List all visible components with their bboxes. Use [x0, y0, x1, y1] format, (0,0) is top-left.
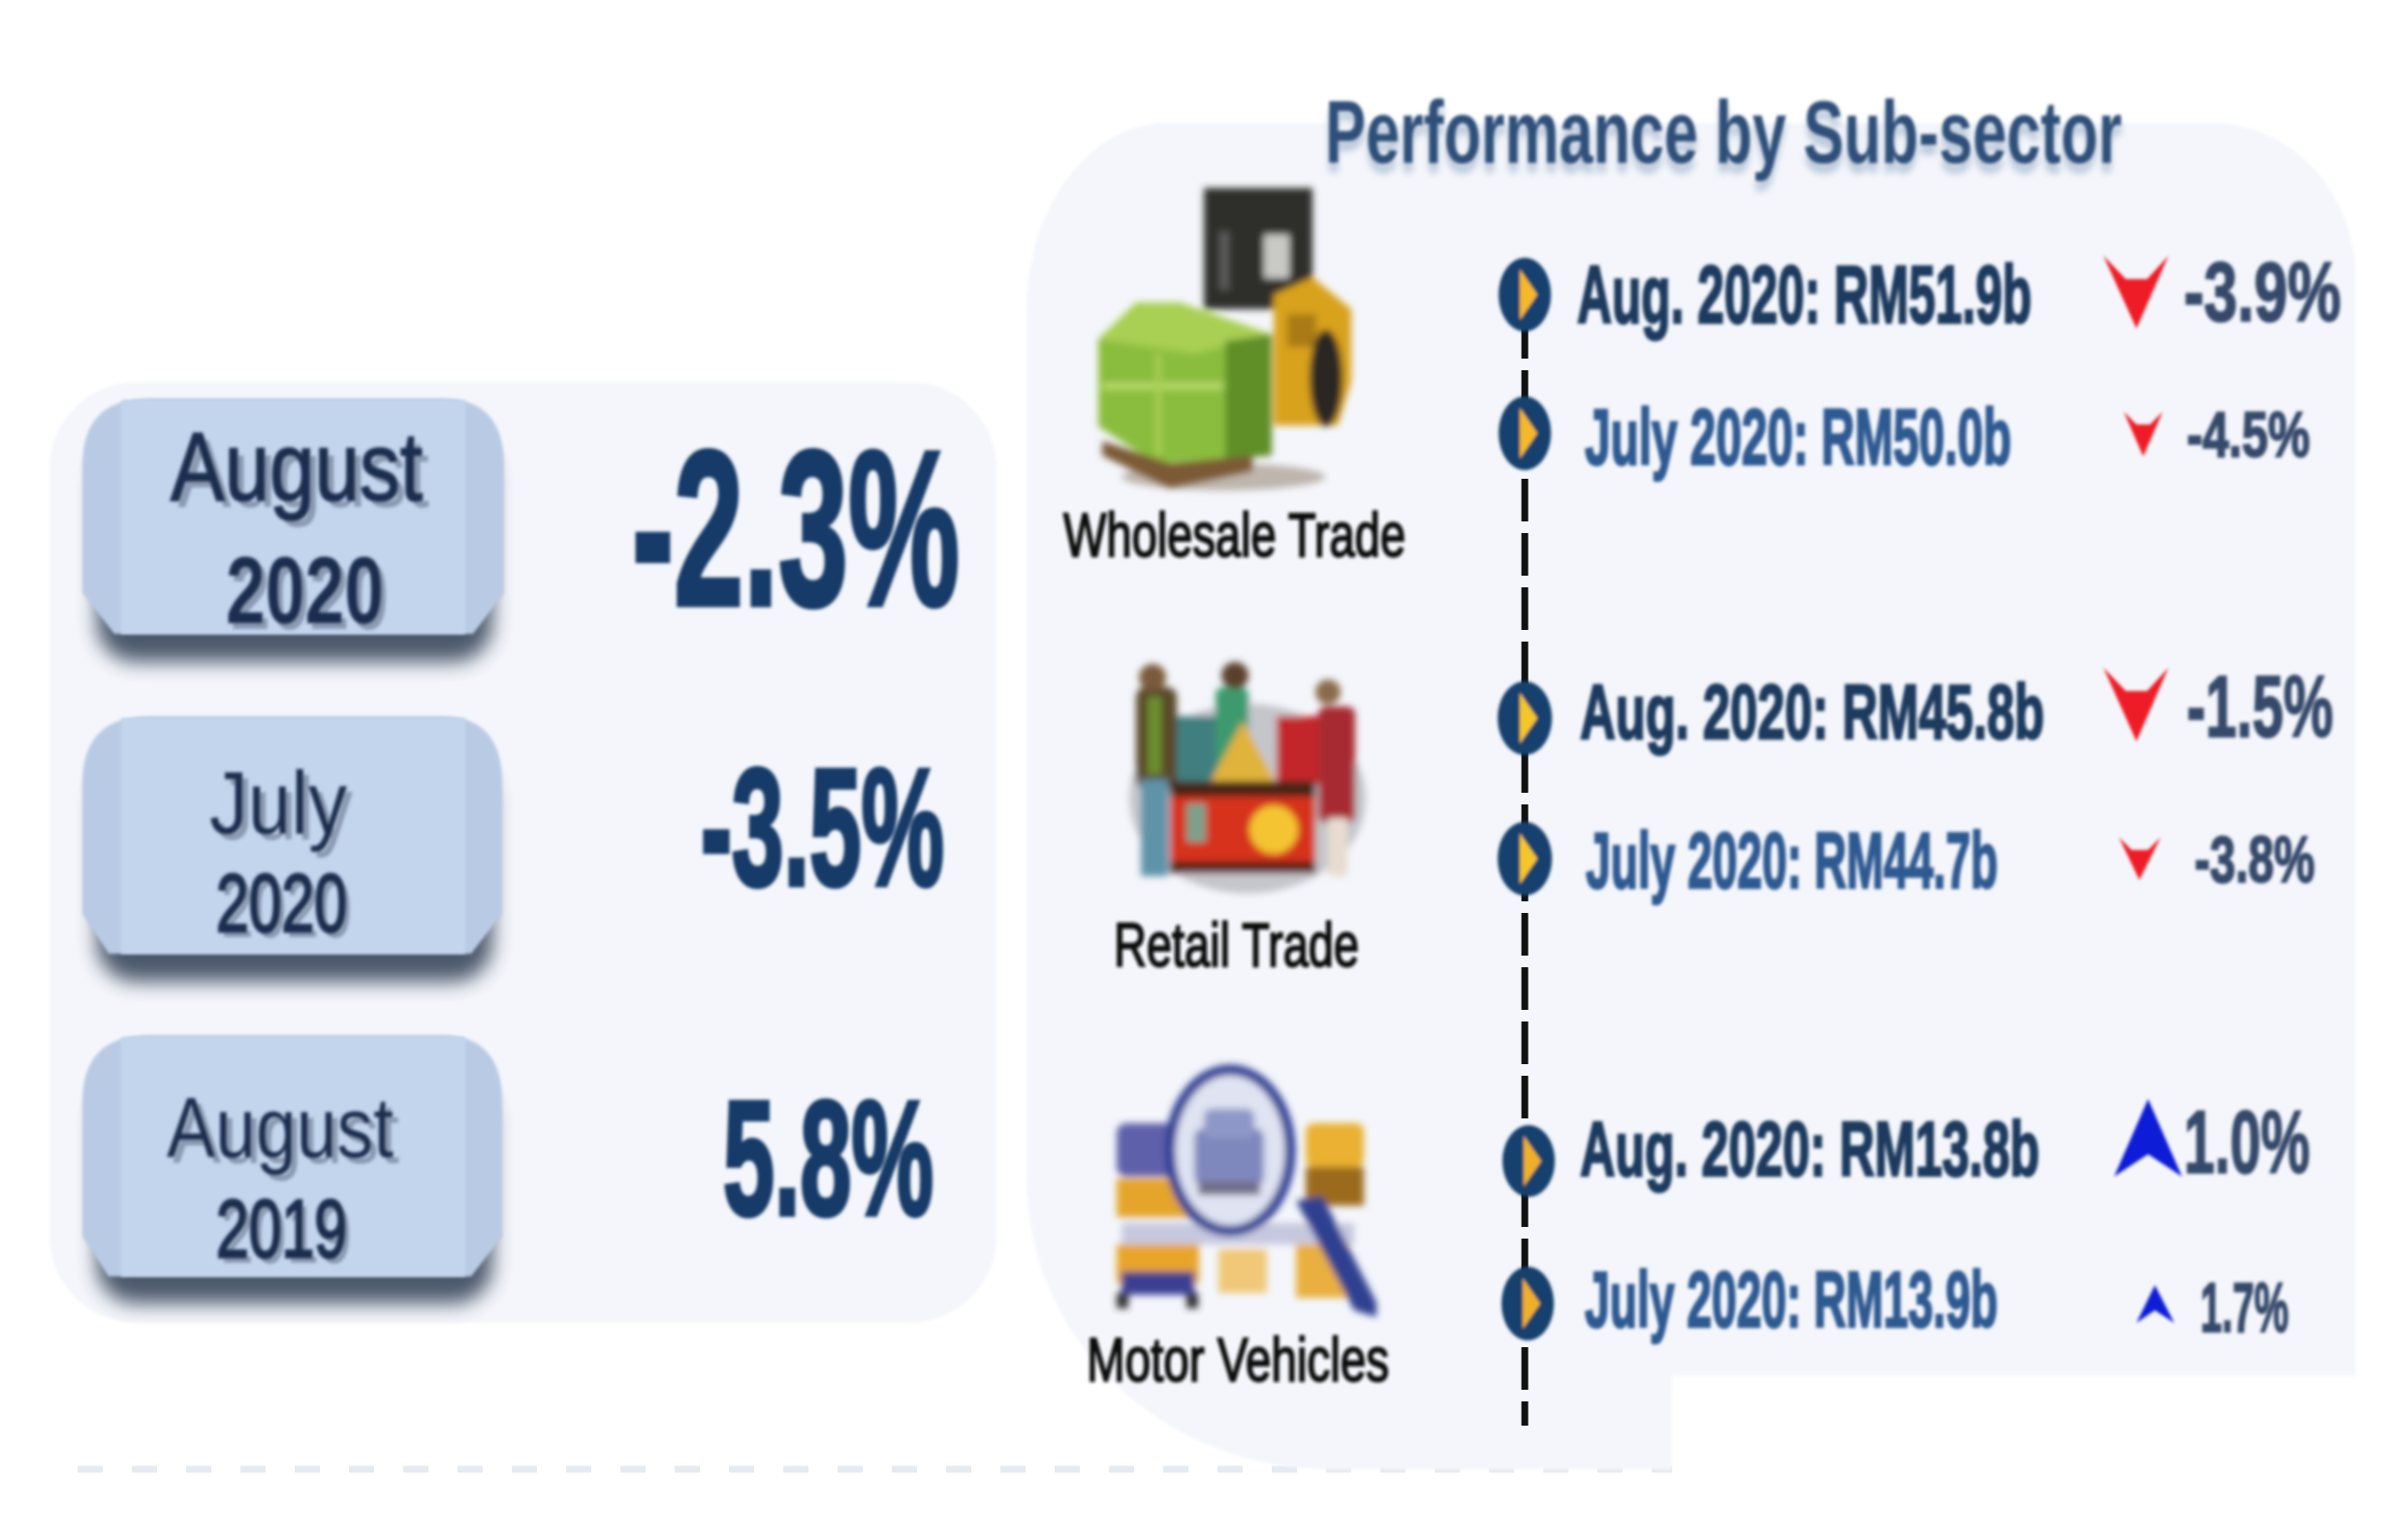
arrow: wholesale August down [2104, 256, 2168, 329]
icon: cars under magnifying glass [1117, 1070, 1376, 1317]
icon: retail traders at stall [1129, 662, 1366, 894]
timeline dashed line [1522, 262, 1528, 1426]
icon: forklift and pallet [1098, 188, 1351, 490]
value: July 2020: -3.5% [701, 735, 944, 921]
value: retail August 2020: Aug. 2020: RM45.8b [1580, 669, 2044, 755]
value: August 2020: -2.3% [632, 406, 960, 652]
row marker: retail July 2020 [1498, 822, 1552, 896]
value: motor August 2020: Aug. 2020: RM13.8b [1580, 1106, 2040, 1192]
arrow: wholesale July down [2124, 412, 2163, 456]
arrow: retail August down [2104, 668, 2168, 741]
date pill: August 2019 [82, 1035, 502, 1304]
date pill: August 2019: August [167, 1080, 394, 1176]
row marker: wholesale August 2020 [1499, 258, 1551, 331]
row marker: wholesale July 2020 [1499, 396, 1551, 470]
title [1325, 83, 2122, 192]
row marker: motor July 2020 [1502, 1267, 1554, 1340]
date pill: August 2020: 2020 [226, 537, 384, 644]
date pill: August 2020: 2020 [231, 543, 389, 649]
panel: performance by sub-sector [1027, 83, 2356, 1469]
date pill: July 2020: July [215, 760, 353, 859]
row marker: retail August 2020 [1498, 681, 1552, 755]
date pill: August 2019: August [173, 1085, 399, 1181]
change: wholesale July: -4.5% [2187, 398, 2310, 470]
date pill: August 2019: 2019 [216, 1183, 347, 1274]
value: wholesale July 2020: July 2020: RM50.0b [1585, 393, 2011, 482]
change: retail July: -3.8% [2195, 823, 2315, 896]
arrow: retail July down [2119, 837, 2161, 880]
label: Motor Vehicles: Motor Vehicles [1087, 1325, 1389, 1395]
change: motor August: 1.0% [2184, 1093, 2310, 1192]
date pill: August 2019: 2019 [221, 1189, 352, 1280]
row marker: motor August 2020 [1502, 1125, 1555, 1197]
arrow: motor August up [2114, 1099, 2182, 1177]
date pill: July 2020: 2020 [216, 858, 347, 949]
date pill: July 2020 [82, 716, 502, 982]
value: August 2019: 5.8% [723, 1067, 933, 1249]
date pill: July 2020: 2020 [221, 864, 352, 955]
arrow: motor July up [2136, 1285, 2174, 1323]
date pill: July 2020: July [209, 754, 347, 853]
change: wholesale August: -3.9% [2184, 246, 2341, 339]
panel: overall growth rates [49, 382, 996, 1323]
value: wholesale August 2020: Aug. 2020: RM51.9b [1577, 249, 2032, 340]
label: Wholesale Trade: Wholesale Trade [1063, 500, 1406, 570]
value: retail July 2020: July 2020: RM44.7b [1586, 817, 1998, 905]
date pill: August 2020 [82, 398, 504, 662]
label: Retail Trade: Retail Trade [1114, 910, 1359, 980]
change: motor July: 1.7% [2200, 1270, 2289, 1347]
date pill: August 2020: August [171, 413, 423, 521]
value: motor July 2020: July 2020: RM13.9b [1585, 1256, 1998, 1344]
date pill: August 2020: August [177, 420, 429, 528]
